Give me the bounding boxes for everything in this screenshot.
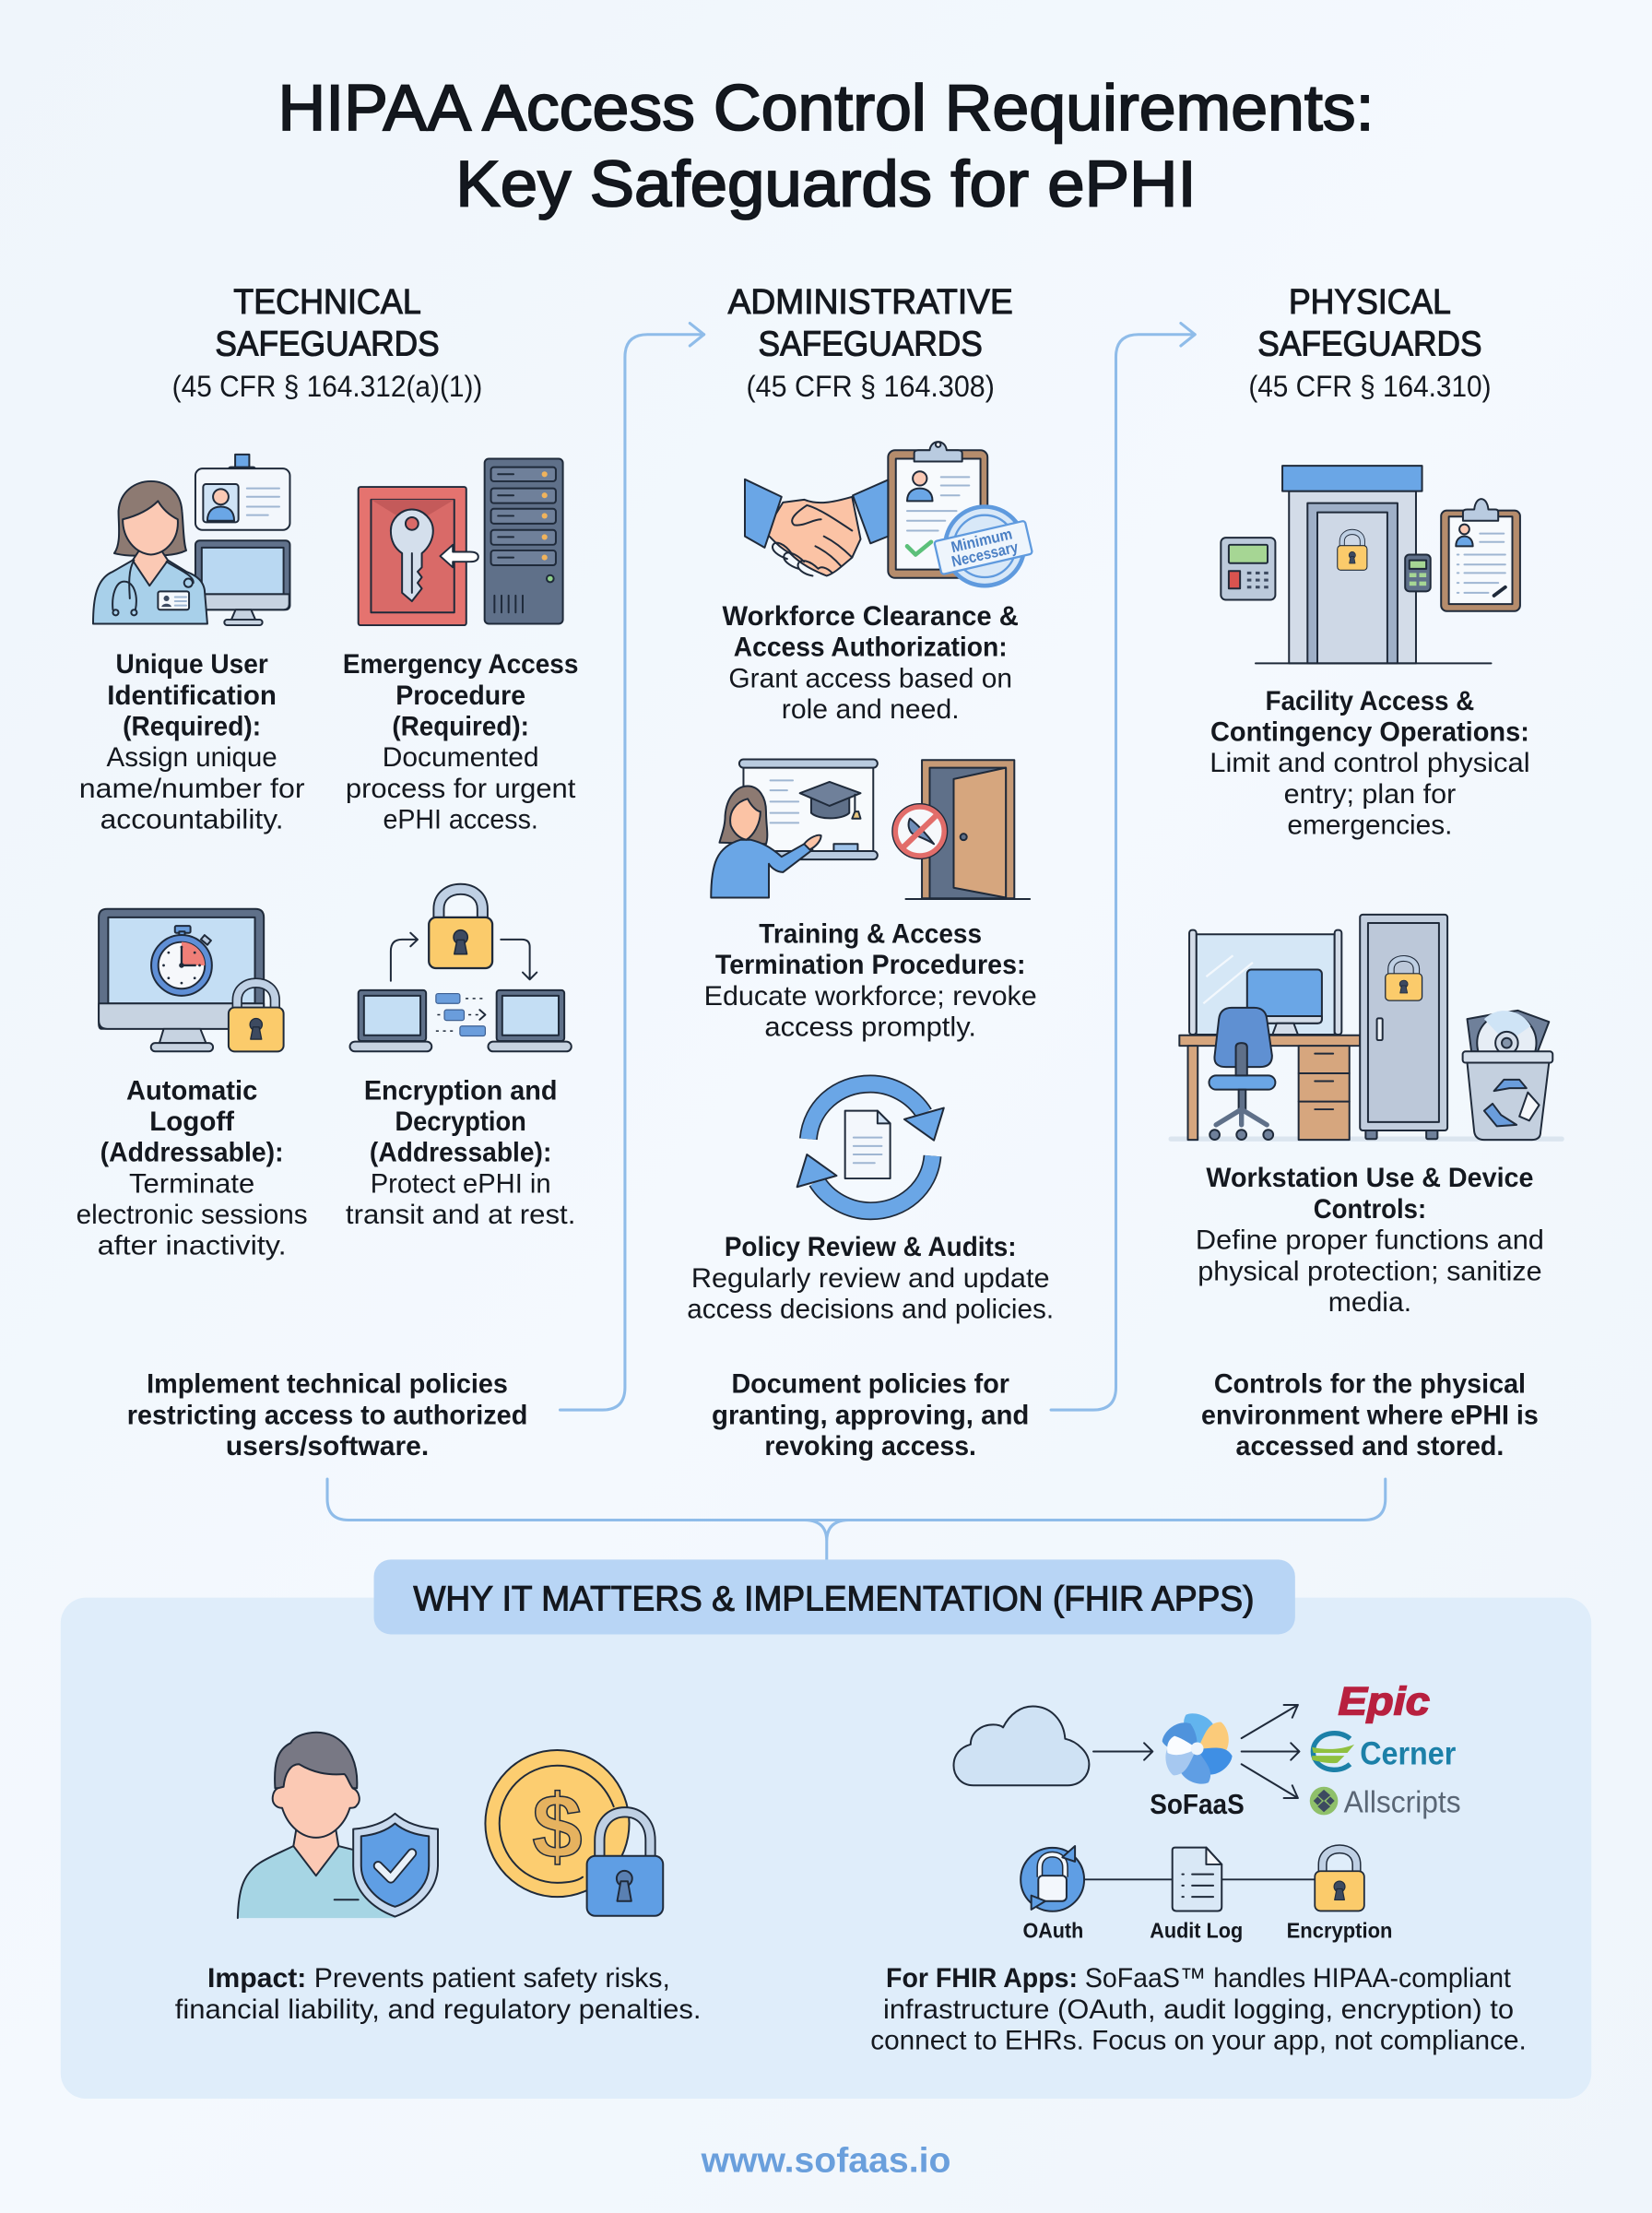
title: Key Safeguards for ePHI	[455, 147, 1197, 219]
icon: OAuth	[1021, 1846, 1084, 1911]
arrow: cloud to SoFaaS	[1093, 1743, 1152, 1760]
bracket connector to implementation section	[327, 1479, 1386, 1559]
text: facility access: emergencies.	[1287, 811, 1452, 841]
text: policy review and audits	[687, 1232, 1054, 1325]
text: training and termination: access promptly.	[764, 1012, 976, 1042]
summary: physical: Controls for the physical	[1214, 1369, 1526, 1400]
summary: technical	[127, 1369, 527, 1462]
banner heading	[374, 1559, 1295, 1634]
text: workstation use and device controls: physical protection; sanitize	[1198, 1256, 1542, 1286]
text: workstation use and device controls: media.	[1328, 1287, 1411, 1318]
text: unique user identification: name/number for	[79, 774, 305, 804]
text: automatic logoff: Logoff	[149, 1106, 234, 1137]
text: encryption and decryption: transit and at rest.	[346, 1200, 575, 1230]
panel: why it matters	[61, 1598, 1591, 2099]
text: training and termination: Termination Procedures:	[715, 950, 1026, 980]
text: workforce clearance: Workforce Clearance &	[723, 601, 1019, 632]
heading: administrative safeguards	[728, 282, 1013, 403]
icon: audit log document	[1173, 1848, 1221, 1911]
text: emergency access procedure: Emergency Access	[343, 649, 578, 680]
logo: Cerner	[1312, 1734, 1457, 1771]
heading: administrative safeguards: ADMINISTRATIVE	[728, 282, 1013, 322]
text: policy review and audits: Regularly review and update	[691, 1263, 1050, 1294]
text: automatic logoff: after inactivity.	[98, 1231, 287, 1261]
banner heading: WHY IT MATTERS & IMPLEMENTATION (FHIR APPS)	[413, 1579, 1254, 1618]
text: unique user identification: Unique User	[115, 649, 268, 680]
text: policy review and audits: access decisions and policies.	[687, 1295, 1054, 1325]
summary: physical: accessed and stored.	[1236, 1431, 1504, 1462]
icon: nurse with id badge and monitor	[93, 455, 289, 625]
text: training and termination: Educate workforce; revoke	[704, 981, 1037, 1012]
text: workstation use and device controls: Define proper functions and	[1196, 1225, 1544, 1256]
text: workforce clearance: Access Authorization:	[734, 633, 1008, 663]
icon: SoFaaS logo	[1158, 1713, 1237, 1784]
labels: Encryption	[1287, 1919, 1392, 1943]
summary: administrative: revoking access.	[764, 1431, 976, 1462]
labels	[1022, 1919, 1392, 1943]
text: training and termination: Training & Access	[759, 918, 982, 949]
text: workforce clearance	[723, 601, 1019, 725]
label: SoFaaS: SoFaaS	[1150, 1789, 1245, 1820]
logo: Cerner: Cerner	[1360, 1735, 1457, 1771]
icon: patient with shield	[238, 1733, 438, 1918]
heading: technical safeguards: (45 CFR § 164.312(a)(1))	[172, 370, 482, 403]
heading: technical safeguards	[172, 282, 482, 403]
icon: facility access door and keypads	[1221, 466, 1520, 663]
heading: physical safeguards: PHYSICAL	[1289, 282, 1451, 322]
text: encryption and decryption: Decryption	[395, 1106, 526, 1137]
icon: workstation, locked cabinet and media bin	[1171, 915, 1562, 1140]
text: unique user identification	[79, 649, 305, 834]
text: automatic logoff: electronic sessions	[77, 1200, 308, 1230]
heading: physical safeguards: (45 CFR § 164.310)	[1248, 370, 1492, 403]
text: workstation use and device controls: Controls:	[1314, 1194, 1426, 1225]
text: policy review and audits: Policy Review & Audits:	[725, 1232, 1017, 1262]
logo: Epic: Epic	[1339, 1680, 1430, 1724]
icon: encryption padlock	[1315, 1849, 1364, 1911]
text: unique user identification: Identification	[107, 680, 277, 711]
summary: administrative	[712, 1369, 1029, 1462]
title	[277, 71, 1375, 219]
labels: Audit Log	[1150, 1919, 1243, 1943]
text: encryption and decryption: Protect ePHI in	[371, 1168, 551, 1199]
text: impact: Impact: Prevents patient safety risks,	[207, 1963, 670, 1994]
text: encryption and decryption: (Addressable):	[370, 1138, 551, 1168]
icon: emergency key box and server	[359, 458, 563, 625]
text: unique user identification: Assign unique	[107, 742, 277, 773]
diagram: OAuth, audit log, encryption row	[1021, 1846, 1392, 1943]
icon: coin with padlock: $	[532, 1775, 583, 1876]
text: emergency access procedure: Documented	[383, 742, 539, 773]
icon: handshake and clearance clipboard: Necessary	[950, 538, 1021, 571]
icon: cloud	[953, 1707, 1089, 1785]
text: unique user identification: accountability.	[100, 804, 284, 834]
text: facility access: Limit and control physical	[1210, 748, 1530, 778]
text: for FHIR apps	[870, 1963, 1527, 2055]
text: facility access: entry; plan for	[1284, 779, 1456, 810]
text: automatic logoff: (Addressable):	[100, 1138, 284, 1168]
text: workforce clearance: role and need.	[782, 694, 960, 725]
icon: encryption and decryption between laptops	[350, 889, 572, 1051]
heading: administrative safeguards: (45 CFR § 164.308)	[747, 370, 995, 403]
text: automatic logoff	[77, 1075, 308, 1261]
arrow: administrative to physical	[1051, 324, 1195, 1410]
text: workstation use and device controls	[1196, 1163, 1544, 1318]
text: emergency access procedure	[343, 649, 578, 834]
text: workforce clearance: Grant access based on	[728, 663, 1012, 693]
icon: training board and access termination door	[711, 759, 1030, 899]
summary: administrative: granting, approving, and	[712, 1400, 1029, 1430]
text: encryption and decryption	[346, 1075, 575, 1230]
icon: automatic logoff monitor with stopwatch	[99, 909, 284, 1051]
icon: coin with padlock	[485, 1750, 663, 1916]
text: encryption and decryption: Encryption and	[364, 1075, 557, 1106]
summary: physical	[1201, 1369, 1539, 1462]
text: emergency access procedure: Procedure	[395, 680, 525, 711]
text: facility access	[1210, 686, 1530, 841]
text: emergency access procedure: (Required):	[392, 711, 529, 741]
summary: physical: environment where ePHI is	[1201, 1400, 1539, 1430]
text: unique user identification: (Required):	[123, 711, 261, 741]
text: facility access: Facility Access &	[1266, 686, 1474, 716]
logo: Allscripts: Allscripts	[1344, 1785, 1461, 1819]
diagram: SoFaaS connection to EHRs	[953, 1680, 1461, 1820]
arrows: SoFaaS to EHRs	[1242, 1705, 1299, 1798]
text: automatic logoff: Automatic	[126, 1075, 257, 1106]
text: workstation use and device controls: Workstation Use & Device	[1206, 1163, 1533, 1193]
text: for FHIR apps: infrastructure (OAuth, audit logging, encryption) to	[883, 1994, 1514, 2025]
summary: technical: Implement technical policies	[147, 1369, 508, 1400]
heading: technical safeguards: SAFEGUARDS	[215, 325, 440, 364]
title: HIPAA Access Control Requirements:	[277, 71, 1375, 144]
footer url: www.sofaas.io	[701, 2141, 950, 2181]
text: for FHIR apps: For FHIR Apps: SoFaaS™ handles HIPAA-compliant	[886, 1963, 1512, 1994]
heading: physical safeguards: SAFEGUARDS	[1257, 325, 1482, 364]
icon: handshake and clearance clipboard	[745, 442, 1032, 586]
summary: technical: users/software.	[226, 1431, 429, 1462]
text: impact: financial liability, and regulatory penalties.	[175, 1994, 702, 2025]
heading: administrative safeguards: SAFEGUARDS	[759, 325, 983, 364]
text: emergency access procedure: ePHI access.	[383, 804, 538, 834]
heading: physical safeguards	[1248, 282, 1492, 403]
arrow: technical to administrative	[560, 324, 704, 1410]
summary: administrative: Document policies for	[731, 1369, 1009, 1400]
labels: OAuth	[1022, 1919, 1083, 1943]
text: training and termination	[704, 918, 1037, 1042]
text: facility access: Contingency Operations:	[1210, 717, 1529, 748]
text: impact	[175, 1963, 702, 2025]
text: for FHIR apps: connect to EHRs. Focus on your app, not compliance.	[870, 2025, 1527, 2055]
text: emergency access procedure: process for urgent	[346, 774, 576, 804]
icon: policy review cycle	[797, 1084, 944, 1211]
heading: technical safeguards: TECHNICAL	[233, 282, 421, 322]
text: automatic logoff: Terminate	[129, 1168, 254, 1199]
summary: technical: restricting access to authorized	[127, 1400, 527, 1430]
icon: handshake and clearance clipboard: Minimum	[950, 525, 1014, 556]
